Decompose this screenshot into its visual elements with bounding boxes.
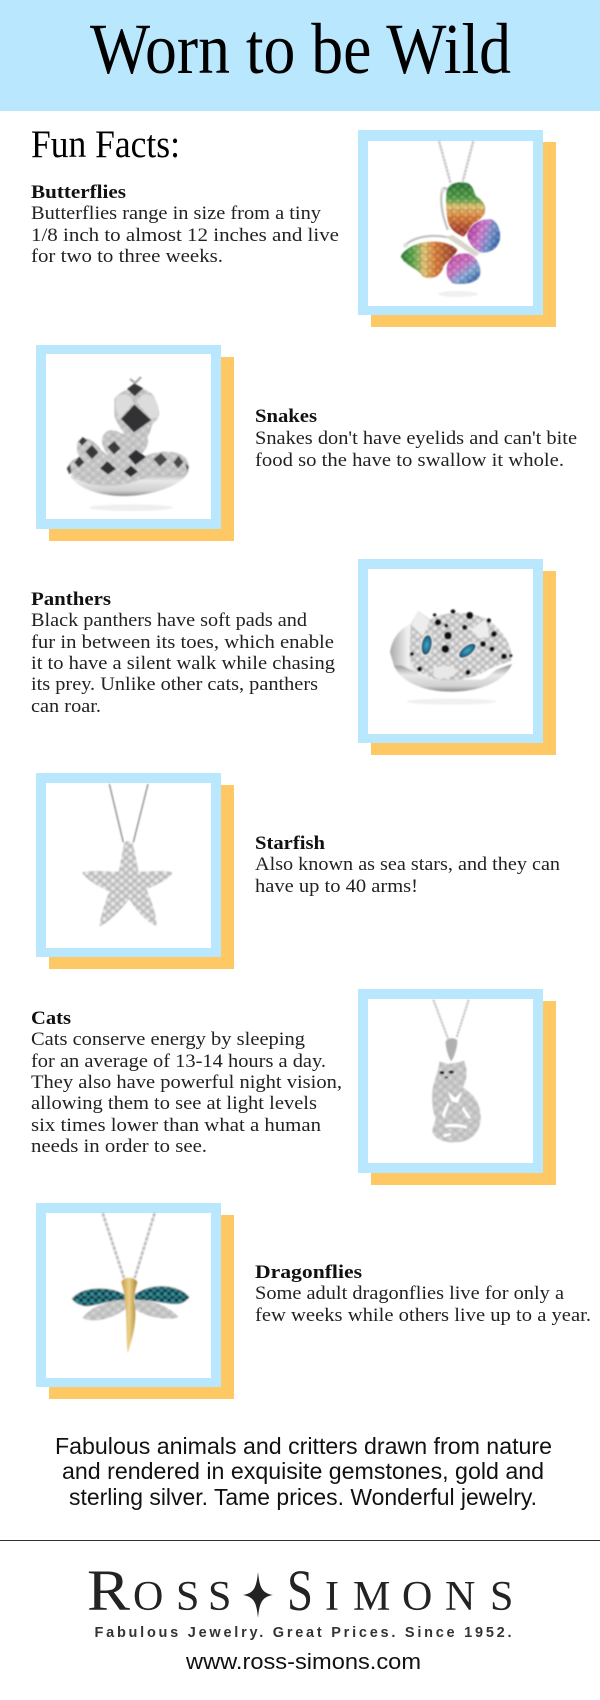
icon: butterfly pendant bbox=[401, 141, 500, 297]
dragonflies text bbox=[255, 1262, 591, 1326]
cats text: Cats bbox=[31, 1008, 71, 1029]
butterflies text bbox=[31, 182, 339, 267]
icon: panther ring bbox=[390, 609, 512, 705]
brand logo: OSS bbox=[133, 1574, 231, 1620]
brand logo bbox=[87, 1558, 513, 1623]
panthers text: Black panthers have soft pads and bbox=[31, 610, 308, 631]
brand logo: S bbox=[287, 1558, 313, 1623]
starfish text: have up to 40 arms! bbox=[255, 876, 418, 897]
icon: dragonfly pendant bbox=[72, 1213, 189, 1353]
cats text: six times lower than what a human bbox=[31, 1115, 322, 1136]
snakes text bbox=[255, 406, 577, 471]
cats text: needs in order to see. bbox=[31, 1136, 207, 1157]
cats text: allowing them to see at light levels bbox=[31, 1093, 317, 1114]
dragonfly pendant photo frame bbox=[36, 1203, 234, 1399]
dragonflies text: Dragonflies bbox=[255, 1262, 362, 1283]
snakes text: Snakes bbox=[255, 406, 317, 427]
title: Worn to be Wild bbox=[90, 9, 511, 89]
closing message: and rendered in exquisite gemstones, gold and bbox=[62, 1458, 544, 1484]
heading: fun facts: Fun Facts: bbox=[31, 123, 180, 166]
starfish pendant photo frame bbox=[36, 773, 234, 969]
cats text: for an average of 13-14 hours a day. bbox=[31, 1051, 326, 1072]
panel: snakes bbox=[36, 345, 577, 541]
panthers text: can roar. bbox=[31, 696, 101, 717]
cats text: They also have powerful night vision, bbox=[31, 1072, 342, 1093]
cat pendant photo frame bbox=[358, 989, 556, 1185]
tagline: Fabulous Jewelry. Great Prices. Since 1952. bbox=[94, 1625, 512, 1641]
panthers text: it to have a silent walk while chasing bbox=[31, 653, 335, 674]
dragonflies text: Some adult dragonflies live for only a bbox=[255, 1283, 564, 1304]
butterfly photo frame bbox=[358, 130, 556, 327]
closing message bbox=[55, 1433, 552, 1510]
panther ring photo frame bbox=[358, 559, 556, 755]
butterflies text: Butterflies bbox=[31, 182, 126, 203]
snakes text: food so the have to swallow it whole. bbox=[255, 450, 564, 471]
panel: cats bbox=[31, 989, 556, 1185]
icon: snake ring bbox=[67, 377, 189, 511]
butterflies text: 1/8 inch to almost 12 inches and live bbox=[31, 225, 339, 246]
icon: four-point star bbox=[243, 1572, 273, 1618]
panthers text: Panthers bbox=[31, 589, 111, 610]
brand logo: IMONS bbox=[325, 1574, 513, 1620]
starfish text: Also known as sea stars, and they can bbox=[255, 854, 561, 875]
panel: starfish bbox=[36, 773, 561, 969]
header banner bbox=[0, 0, 600, 111]
icon: starfish pendant bbox=[82, 784, 173, 926]
cats text: Cats conserve energy by sleeping bbox=[31, 1029, 305, 1050]
panthers text: its prey. Unlike other cats, panthers bbox=[31, 674, 318, 695]
starfish text: Starfish bbox=[255, 833, 326, 854]
panthers text bbox=[31, 589, 335, 717]
panthers text: fur in between its toes, which enable bbox=[31, 632, 334, 653]
snakes text: Snakes don't have eyelids and can't bite bbox=[255, 428, 577, 449]
brand logo: R bbox=[87, 1558, 130, 1623]
icon: cat pendant bbox=[432, 1000, 481, 1142]
butterflies text: Butterflies range in size from a tiny bbox=[31, 203, 322, 224]
closing message: sterling silver. Tame prices. Wonderful jewelry. bbox=[69, 1484, 537, 1510]
snake ring photo frame bbox=[36, 345, 234, 541]
panel: panthers bbox=[31, 559, 556, 755]
butterflies text: for two to three weeks. bbox=[31, 246, 223, 267]
dragonflies text: few weeks while others live up to a year. bbox=[255, 1305, 591, 1326]
closing message: Fabulous animals and critters drawn from nature bbox=[55, 1433, 552, 1459]
starfish text bbox=[255, 833, 561, 897]
panel: dragonflies bbox=[36, 1203, 591, 1399]
cats text bbox=[31, 1008, 342, 1157]
website url: www.ross-simons.com bbox=[185, 1649, 421, 1674]
panel: butterflies bbox=[31, 130, 556, 327]
